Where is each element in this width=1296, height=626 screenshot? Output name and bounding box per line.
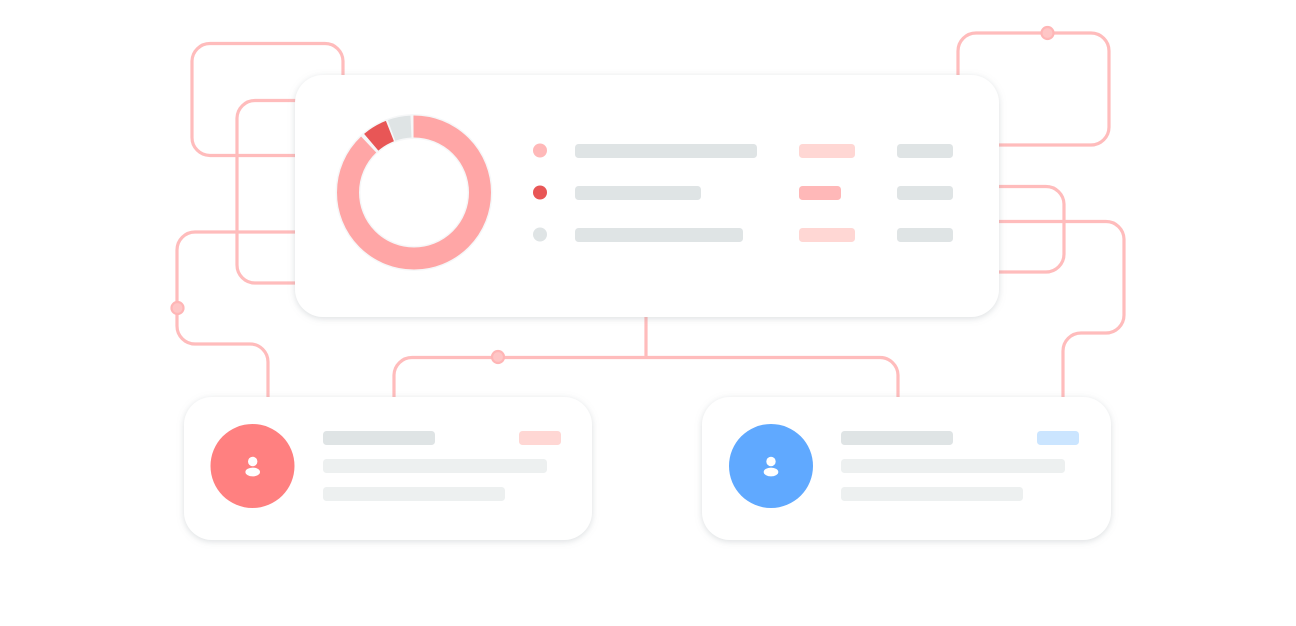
node: top-right connector dot: [1042, 27, 1054, 39]
legend row 3: [533, 228, 953, 242]
connector: right card to main panel: [995, 222, 1124, 397]
node: bottom connector dot: [492, 351, 504, 363]
avatar: blue: [729, 424, 813, 508]
icon: person: [764, 457, 778, 476]
legend row 2: [533, 186, 953, 200]
connector: right inner loop: [995, 186, 1064, 272]
connector: main panel to bottom cards: [394, 315, 898, 397]
donut chart: [348, 126, 480, 258]
connector: left card to main panel: [177, 232, 300, 397]
icon: person: [245, 457, 260, 476]
connector: top-left outer loop: [192, 43, 343, 155]
status tag: blue: [1037, 431, 1079, 445]
node: left connector dot: [172, 302, 184, 314]
connector: top-left inner loop: [237, 100, 300, 283]
placeholder text lines: [323, 459, 547, 501]
legend row 1: [533, 144, 953, 158]
panel: main dashboard: [295, 75, 999, 317]
placeholder text lines: [841, 459, 1065, 501]
avatar: red: [210, 424, 294, 508]
placeholder title: [323, 431, 435, 445]
panel: blue profile card: [702, 397, 1111, 540]
status tag: red: [519, 431, 561, 445]
panel: red profile card: [184, 397, 592, 540]
placeholder title: [841, 431, 953, 445]
connector: top-right loop: [958, 33, 1109, 145]
